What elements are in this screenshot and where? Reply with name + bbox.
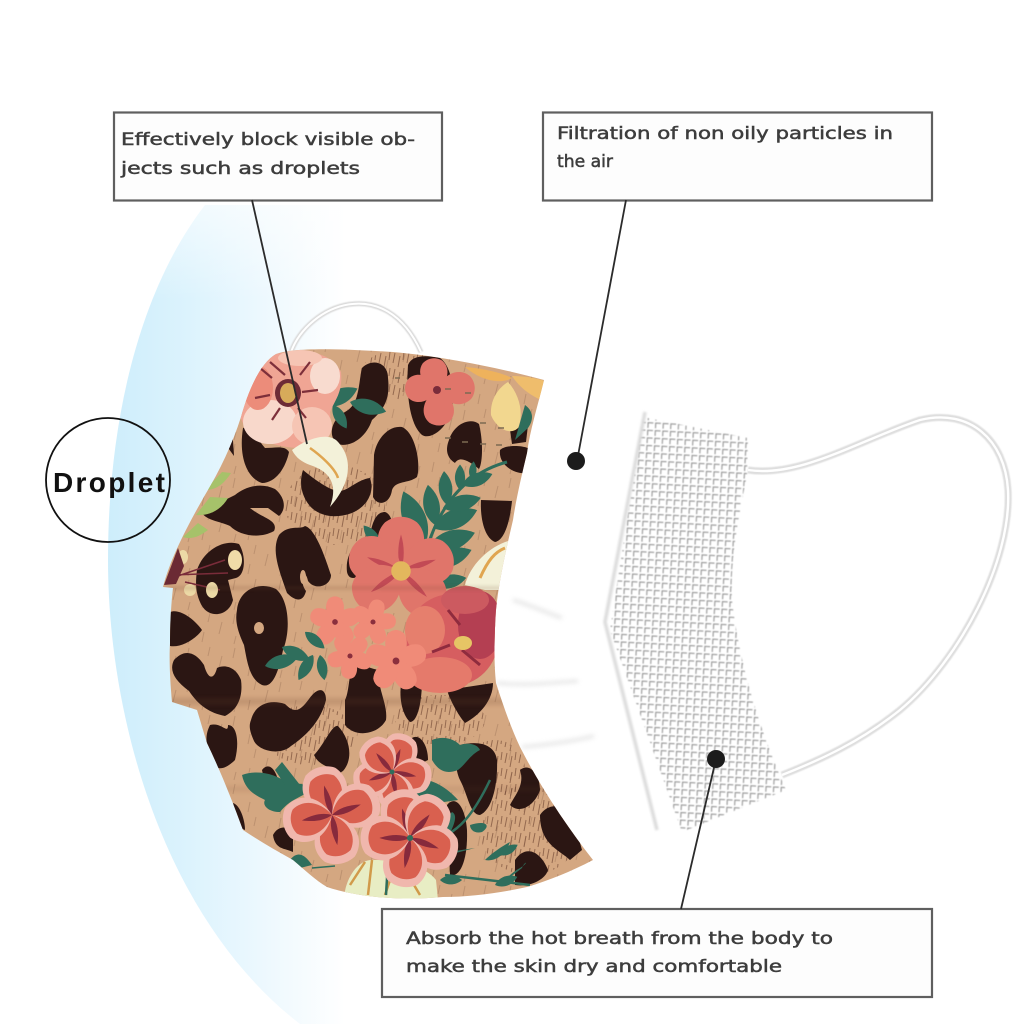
ultrasonic weld dots [395, 377, 504, 446]
small blossom twig left [164, 548, 242, 598]
fold shadows [165, 586, 550, 792]
small salmon flowers cluster [308, 596, 429, 693]
fur texture [172, 349, 590, 897]
pink flower bottom right [360, 789, 458, 888]
fern frond [360, 461, 507, 592]
leader line and dot: middle layer [567, 200, 626, 470]
coral dahlia flower [348, 516, 454, 613]
pink flower bottom left [282, 766, 380, 864]
droplet circle label: Droplet [53, 467, 165, 498]
ear loop: right [748, 417, 1008, 775]
leader line: outer layer [252, 200, 307, 444]
cream bud bottom [344, 860, 438, 900]
callout: block droplets: jects such as droplets [120, 159, 360, 179]
callout: filtration: the air [557, 152, 613, 172]
callout: absorb breath: Absorb the hot breath from the body to [406, 929, 833, 949]
ear loop: top left [291, 304, 421, 352]
leader line and dot: inner layer [681, 750, 725, 909]
cream bud [292, 437, 348, 507]
droplet circle label [46, 418, 170, 542]
callout: filtration [543, 112, 932, 200]
red hibiscus flower [405, 586, 502, 693]
leaves lower centre [410, 738, 530, 889]
green leaves top [332, 387, 386, 428]
blue breath shield crescent [100, 205, 430, 1024]
callout: block droplets [114, 112, 442, 200]
peony flower top left [240, 350, 341, 448]
leopard spots [170, 356, 582, 885]
printed mask front [150, 340, 610, 910]
yellow lily top right [465, 367, 545, 440]
pink small flower top [404, 356, 476, 427]
callout: absorb breath [382, 909, 932, 997]
cream lily right [465, 541, 508, 590]
callout: absorb breath: make the skin dry and comfortable [406, 957, 782, 977]
inner mesh layer [610, 417, 786, 832]
callout: block droplets: Effectively block visible ob- [121, 130, 415, 150]
white band of mask [494, 379, 657, 861]
callout: filtration: Filtration of non oily particles in [557, 124, 893, 144]
leaves lower left [242, 762, 335, 868]
pink flower bottom top [353, 733, 432, 804]
green leaves center [265, 632, 328, 680]
lime leaves on left [183, 472, 231, 538]
tan base [150, 340, 610, 910]
